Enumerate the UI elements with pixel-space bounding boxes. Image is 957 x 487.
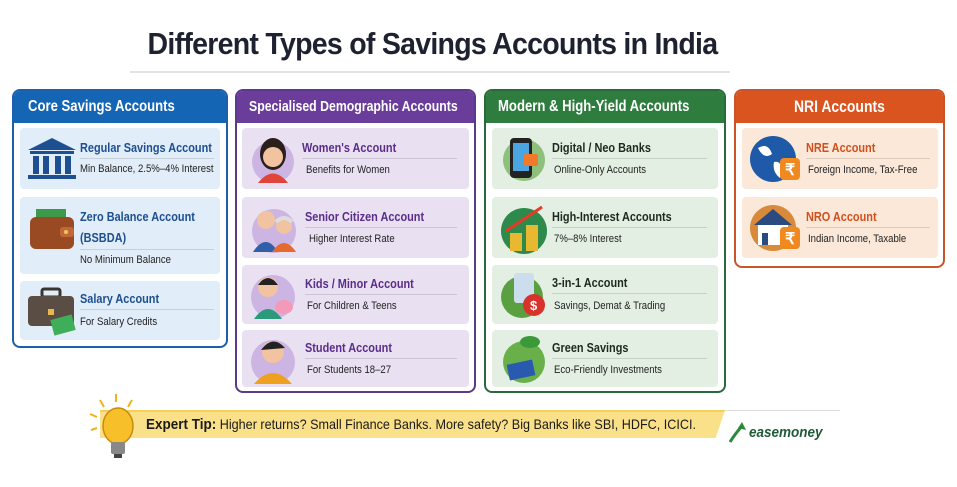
card: student: Student Account	[305, 340, 392, 355]
icon: globe rupee	[750, 136, 800, 182]
card: zero balance	[20, 197, 220, 274]
card: student	[242, 330, 469, 387]
card: salary: Salary Account	[80, 291, 159, 306]
card: kids: For Children & Teens	[307, 300, 397, 312]
card: NRO	[742, 197, 938, 258]
card: NRE: NRE Account	[806, 140, 875, 155]
heading: modern	[486, 91, 724, 123]
icon: house rupee	[750, 205, 800, 251]
card: women: Women's Account	[302, 140, 396, 155]
panel: demographic	[235, 89, 476, 393]
card: green savings	[492, 330, 718, 387]
icon: leaf solar	[503, 336, 545, 383]
card: senior citizen: Higher Interest Rate	[309, 233, 395, 245]
logo: easemoney: easemoney	[749, 424, 823, 441]
card: NRO: NRO Account	[806, 209, 877, 224]
card: zero balance: No Minimum Balance	[80, 254, 171, 266]
icon: woman	[252, 138, 294, 183]
panel: modern	[484, 89, 726, 393]
panel: NRI	[734, 89, 945, 268]
icon: globe rupee: ₹	[785, 162, 795, 179]
icon: light bulb	[90, 394, 134, 458]
card: regular savings	[20, 128, 220, 189]
heading: modern: Modern & High-Yield Accounts	[498, 98, 689, 115]
card: NRE	[742, 128, 938, 189]
card: regular savings: Regular Savings Account	[80, 140, 212, 155]
card: 3-in-1: 3-in-1 Account	[552, 275, 627, 290]
card: women: Benefits for Women	[306, 164, 390, 176]
card: high interest: High-Interest Accounts	[552, 209, 672, 224]
card: student: For Students 18–27	[307, 364, 391, 376]
panel: core savings	[12, 89, 228, 348]
icon: phone	[503, 138, 545, 181]
icon: bank	[28, 138, 76, 179]
card: 3-in-1: Savings, Demat & Trading	[554, 300, 665, 312]
icon: growth coins	[501, 206, 547, 254]
heading: NRI	[736, 91, 943, 123]
heading: NRI: NRI Accounts	[794, 97, 885, 116]
title: Different Types of Savings Accounts in India	[148, 26, 717, 61]
icon: kid	[251, 275, 295, 319]
card: salary: For Salary Credits	[80, 316, 157, 328]
card: green savings: Green Savings	[552, 340, 628, 355]
icon: house rupee: ₹	[785, 231, 795, 248]
icon: 3-in-1	[501, 273, 545, 318]
card: kids: Kids / Minor Account	[305, 276, 414, 291]
heading: demographic: Specialised Demographic Accounts	[249, 98, 458, 115]
card: kids	[242, 265, 469, 324]
heading: core	[14, 91, 226, 123]
card: digital: Online-Only Accounts	[554, 164, 646, 176]
card: senior citizen: Senior Citizen Account	[305, 209, 424, 224]
icon: student	[251, 340, 295, 384]
card: senior citizen	[242, 197, 469, 258]
heading: demographic	[237, 91, 474, 123]
card: salary	[20, 281, 220, 340]
card: digital	[492, 128, 718, 189]
card: women	[242, 128, 469, 189]
callout: expert tip	[100, 410, 725, 438]
card: high interest: 7%–8% Interest	[554, 233, 622, 245]
icon: wallet	[30, 209, 74, 249]
card: NRE: Foreign Income, Tax-Free	[808, 164, 917, 176]
tip text: Expert Tip: Higher returns? Small Finance Banks. More safety? Big Banks like SBI, HDFC, ICICI.	[146, 416, 696, 433]
card: high interest	[492, 197, 718, 258]
card: digital: Digital / Neo Banks	[552, 140, 651, 155]
logo: easemoney	[728, 422, 823, 443]
card: 3-in-1	[492, 265, 718, 324]
icon: 3-in-1: $	[530, 298, 538, 313]
card: regular savings: Min Balance, 2.5%–4% Interest	[80, 163, 214, 175]
card: zero balance: (BSBDA)	[80, 230, 126, 245]
card: zero balance: Zero Balance Account	[80, 209, 195, 224]
heading: core: Core Savings Accounts	[28, 98, 175, 115]
icon: seniors	[252, 209, 296, 253]
card: green savings: Eco-Friendly Investments	[554, 364, 662, 376]
icon: briefcase	[28, 288, 76, 336]
card: NRO: Indian Income, Taxable	[808, 233, 906, 245]
